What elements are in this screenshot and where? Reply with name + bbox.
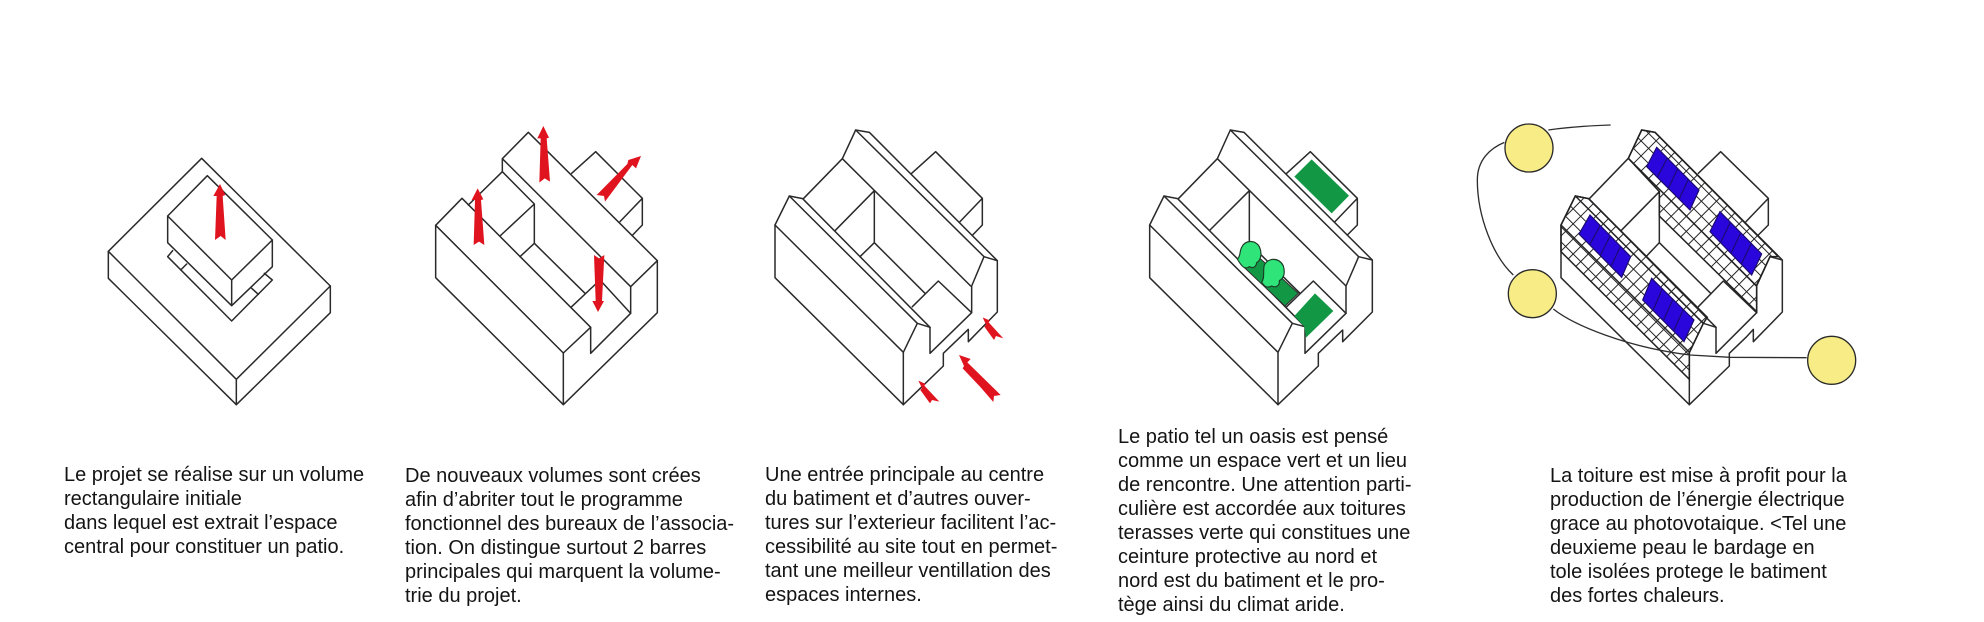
solar panel: back left [1647,147,1699,210]
text block 3: Une entrée principale au centre [765,464,1044,486]
text block 4: terasses verte qui constitues une [1118,522,1410,544]
solar panel: front right [1643,278,1694,342]
text block 1: central pour constituer un patio. [64,536,344,558]
sun: top [1505,124,1553,172]
solar panel: front left [1579,215,1631,277]
arrow: up [213,184,226,240]
text block 3 [765,464,1057,606]
text block 3: cessibilité au site tout en permet- [765,536,1057,558]
solar panel: back right [1710,212,1762,275]
text block 1: Le projet se réalise sur un volume [64,464,364,486]
text block 4: ceinture protective au nord et [1118,546,1377,568]
text block 5: tole isolées protege le batiment [1550,561,1827,583]
text block 4: nord est du batiment et le pro- [1118,570,1385,592]
extracted central volume [168,176,272,321]
text block 4: Le patio tel un oasis est pensé [1118,426,1388,448]
text block 5: La toiture est mise à profit pour la [1550,465,1847,487]
text block 3: tant une meilleur ventillation des [765,560,1051,582]
text block 2 [405,465,734,607]
arrow: small right [983,317,1003,340]
diagram 5: photovoltaic roof and sun path [1476,123,1856,406]
text block 1: rectangulaire initiale [64,488,242,510]
cladding: front bar [1561,196,1707,379]
sun: right [1808,336,1856,384]
diagram 4: green patio and terraces [1148,129,1374,406]
building outline [775,130,997,405]
text block 2: afin d’abriter tout le programme [405,489,683,511]
building outline [1561,130,1782,405]
arrow: down [592,255,604,312]
base volume [108,158,330,405]
tree: right [1262,259,1284,287]
text block 5 [1550,465,1847,607]
patio lawn [1243,258,1298,306]
sun path [1477,125,1807,358]
diagram 1: initial volume with extracted patio [108,158,332,406]
tree: left [1237,241,1261,268]
arrow: up centre [537,126,550,183]
text block 4: de rencontre. Une attention parti- [1118,474,1412,496]
green terrace: patio block [1294,293,1333,338]
arrow: up left [472,188,484,245]
text block 2: tion. On distingue surtout 2 barres [405,537,706,559]
arrow: small left [918,381,939,403]
diagram 2: new volumes [434,126,658,406]
text block 1 [64,464,364,558]
text block 1: dans lequel est extrait l’espace [64,512,338,534]
text block 3: tures sur l’exterieur facilitent l’ac- [765,512,1056,534]
text block 5: grace au photovotaique. <Tel une [1550,513,1846,535]
text block 4 [1118,426,1412,616]
text block 5: deuxieme peau le bardage en [1550,537,1815,559]
text block 3: du batiment et d’autres ouver- [765,488,1031,510]
text block 5: production de l’énergie électrique [1550,489,1845,511]
green terrace: annex roof [1294,159,1349,213]
building outline [1150,130,1372,405]
text block 2: fonctionnel des bureaux de l’associa- [405,513,734,535]
diagram 3: entries and openings [774,129,1004,406]
text block 2: De nouveaux volumes sont crées [405,465,701,487]
text block 4: tège ainsi du climat aride. [1118,594,1345,616]
arrow: diagonal [597,156,641,202]
text block 4: comme un espace vert et un lieu [1118,450,1407,472]
text block 2: trie du projet. [405,585,522,607]
text block 3: espaces internes. [765,584,922,606]
building outline [436,132,657,405]
cladding: back bar [1628,130,1778,312]
text block 5: des fortes chaleurs. [1550,585,1725,607]
text block 4: culière est accordée aux toitures [1118,498,1406,520]
text block 2: principales qui marquent la volume- [405,561,721,583]
arrow: main entry [959,355,1001,402]
sun: middle [1508,270,1556,318]
